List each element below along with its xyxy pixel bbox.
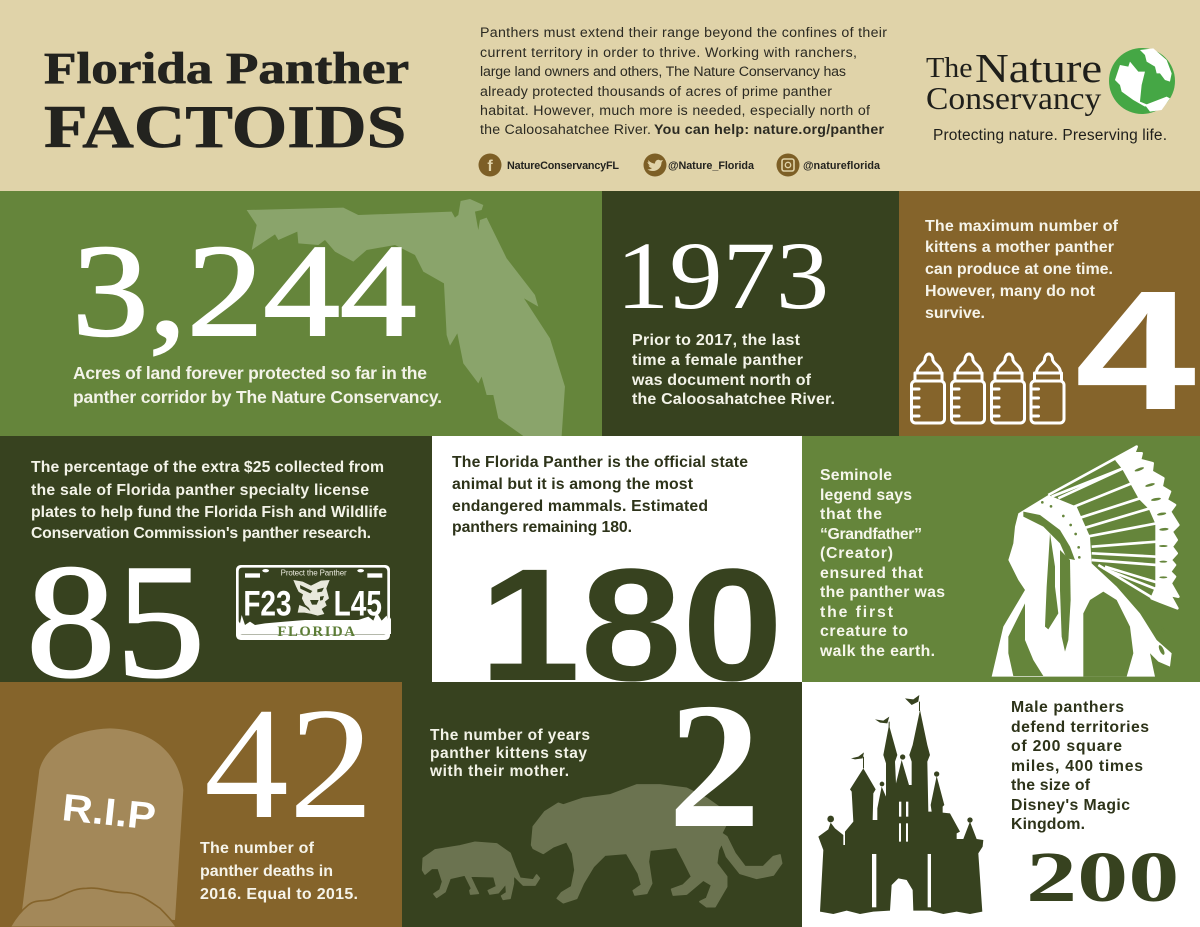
caption: kittens: survive. [925, 305, 985, 322]
caption: years [429, 727, 590, 780]
social: facebook [478, 154, 619, 176]
icon: chief silhouette [992, 447, 1178, 677]
caption: license plates: the sale of Florida panther specialty license [31, 482, 369, 499]
caption: territories: of 200 square [1011, 738, 1122, 755]
caption: license plates [31, 459, 387, 542]
caption: legend: the panther was [820, 584, 945, 601]
icon: panther and kitten [423, 785, 782, 907]
caption: legend: “Grandfather” [820, 526, 922, 543]
icon: tombstone: R.I.P [60, 786, 158, 838]
logo: The Nature Conservancy: Conservancy [926, 82, 1102, 117]
caption: 1973 [631, 332, 835, 408]
number: 4: 4 [1075, 256, 1196, 446]
caption: territories: Disney's Magic [1011, 797, 1130, 814]
social: twitter [644, 154, 755, 176]
icon: license plate: Protect the Panther [281, 569, 347, 578]
panel: 180 remaining [432, 436, 802, 715]
panel: Seminole legend [802, 436, 1200, 682]
panel: header [0, 0, 1200, 191]
caption: years: with their mother. [429, 763, 569, 780]
social: instagram [776, 154, 881, 176]
panel: 1973 [602, 191, 899, 436]
number: 1973: 1973 [616, 223, 829, 329]
caption: acres [73, 363, 442, 407]
caption: years: panther kittens stay [430, 745, 587, 762]
panel: 2 years [402, 665, 802, 927]
caption: license plates: The percentage of the extra $25 collected from [31, 459, 384, 476]
caption: state animal [452, 454, 748, 536]
icon: tombstone [10, 728, 183, 927]
caption: deaths: panther deaths in [200, 863, 333, 880]
caption: license plates: Conservation Commission's panther research. [31, 525, 371, 542]
icon: Florida map [247, 199, 565, 436]
title: Florida Panther [44, 43, 409, 93]
caption: legend: that the [820, 506, 882, 523]
intro text block: habitat. However, much more is needed, especially north of [480, 103, 870, 119]
panel: 42 deaths [0, 674, 402, 927]
caption: legend: legend says [820, 487, 912, 504]
caption: 1973: time a female panther [632, 352, 803, 369]
caption: kittens: The maximum number of [925, 218, 1119, 235]
caption: legend: the first [820, 604, 894, 621]
icon: bottles [912, 354, 1064, 423]
caption: 1973: was document north of [631, 372, 812, 389]
intro text block: large land owners and others, The Nature Conservancy has [480, 64, 846, 80]
caption: state animal: animal but it is among the most [452, 476, 694, 493]
caption: kittens: kittens a mother panther [925, 239, 1114, 256]
logo: The Nature Conservancy: Protecting nature. Preserving life. [933, 127, 1167, 144]
panel: 4 kittens [899, 191, 1200, 446]
logo: The Nature Conservancy: Nature [975, 46, 1102, 91]
social: facebook: NatureConservancyFL [507, 160, 619, 172]
caption: territories: defend territories [1011, 719, 1149, 736]
caption: years: The number of years [430, 727, 590, 744]
caption: territories: Male panthers [1011, 699, 1124, 716]
caption: deaths: 2016. Equal to 2015. [200, 886, 358, 903]
panel: 85 percent [0, 436, 432, 712]
intro text block: current territory in order to thrive. Working with ranchers, [480, 45, 857, 61]
caption: kittens [925, 218, 1119, 322]
caption: legend [819, 467, 945, 660]
number: 180: 180 [479, 536, 783, 715]
icon: license plate [236, 565, 391, 640]
icon: license plate: F23 [243, 584, 292, 623]
panel: 3,244 acres [0, 191, 602, 436]
title [44, 43, 409, 161]
caption: kittens: can produce at one time. [925, 261, 1113, 278]
number: 42: 42 [204, 674, 374, 852]
caption: acres: panther corridor by The Nature Conservancy. [73, 387, 442, 407]
caption: license plates: plates to help fund the Florida Fish and Wildlife [31, 504, 387, 521]
caption: state animal: The Florida Panther is the official state [452, 454, 748, 471]
caption: kittens: However, many do not [925, 283, 1096, 300]
caption: territories: miles, 400 times [1011, 758, 1143, 775]
caption: 1973: Prior to 2017, the last [632, 332, 801, 349]
caption: territories: Kingdom. [1011, 816, 1085, 833]
caption: deaths [200, 840, 358, 903]
caption: legend: ensured that [820, 565, 924, 582]
intro text block: You can help: nature.org/panther [654, 122, 884, 138]
social: instagram: @natureflorida [803, 160, 881, 172]
icon: license plate: FLORIDA [277, 624, 355, 640]
icon: license plate: L45 [334, 584, 382, 623]
intro text block: Panthers must extend their range beyond the confines of their [480, 25, 887, 41]
intro text block: already protected thousands of acres of prime panther [480, 84, 832, 100]
caption: acres: Acres of land forever protected so far in the [73, 363, 427, 383]
caption: deaths: The number of [200, 840, 315, 857]
icon: castle [818, 695, 983, 914]
caption: territories: the size of [1011, 777, 1091, 794]
caption: 1973: the Caloosahatchee River. [632, 391, 835, 408]
number: 85: 85 [26, 531, 205, 712]
panel: 200 square miles [802, 682, 1200, 927]
logo: The Nature Conservancy: The [926, 53, 973, 84]
caption: territories [1011, 699, 1149, 833]
title: FACTOIDS [44, 94, 406, 161]
caption: legend: walk the earth. [819, 643, 935, 660]
caption: state animal: endangered mammals. Estimated [452, 498, 708, 515]
caption: legend: Seminole [820, 467, 892, 484]
number: 200: 200 [1026, 837, 1179, 917]
logo: The Nature Conservancy [926, 46, 1175, 144]
caption: legend: (Creator) [820, 545, 893, 562]
intro text block [480, 25, 887, 138]
caption: state animal: panthers remaining 180. [452, 519, 632, 536]
number: 2: 2 [668, 665, 761, 865]
number: 3,244: 3,244 [72, 218, 416, 364]
social: twitter: @Nature_Florida [668, 160, 755, 172]
intro text block: the Caloosahatchee River. [480, 122, 651, 138]
caption: legend: creature to [820, 623, 908, 640]
social: facebook: f [487, 158, 493, 175]
